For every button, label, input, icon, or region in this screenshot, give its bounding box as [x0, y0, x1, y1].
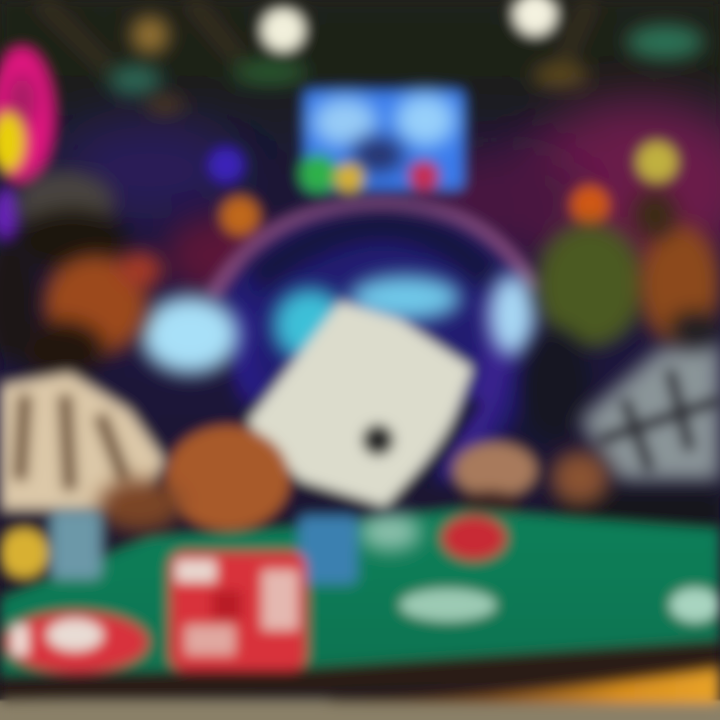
- man's hand: [98, 426, 290, 531]
- display screen: [208, 90, 464, 193]
- halo arc: [212, 204, 535, 480]
- floating lights: [220, 141, 678, 284]
- ceiling lights: [109, 0, 703, 115]
- table rail: [0, 640, 720, 720]
- chip stack: left: [4, 612, 148, 672]
- playing card: [248, 302, 476, 506]
- man: player on the left: [0, 171, 165, 510]
- table markings: [360, 514, 720, 622]
- red chip on table: [442, 516, 506, 560]
- background figures on the right: [521, 191, 720, 530]
- right hands: [453, 442, 608, 519]
- green felt table: [0, 510, 720, 674]
- chip stack: center: [170, 552, 306, 670]
- blue light patches: [142, 275, 534, 373]
- glasses: [0, 510, 358, 585]
- neon heart sign: [0, 47, 54, 241]
